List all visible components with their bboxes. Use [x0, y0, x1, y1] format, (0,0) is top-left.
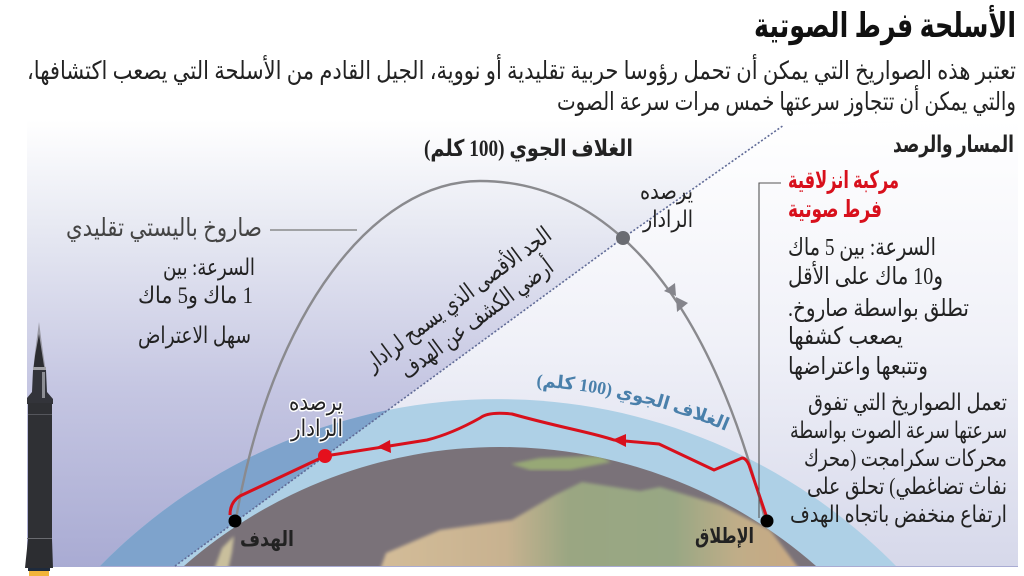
text: hypersonic speed: [788, 235, 943, 290]
background sky: [27, 120, 1018, 567]
label: detected by radar upper: يرصده: [640, 179, 693, 205]
label: detected by radar lower: الرادار: [290, 416, 343, 442]
target dot: [228, 514, 242, 528]
text: ballistic speed: 1 ماك و5 ماك: [138, 283, 253, 309]
label: launch: الإطلاق: [695, 524, 754, 548]
text: ballistic speed: السرعة: بين: [163, 255, 255, 281]
label: detected by radar lower: يرصده: [289, 390, 343, 416]
earth: [184, 447, 816, 570]
rotated label: max radar detection: الحد الأقصى الذي يسمح لرادار: [358, 220, 557, 377]
atmosphere band: [100, 399, 896, 566]
label: target: الهدف: [240, 527, 294, 551]
rotated label: max radar detection: [358, 220, 559, 384]
text: hypersonic launch: وتتبعها واعتراضها: [788, 354, 928, 380]
curved label: atmosphere: الغلاف الجوي (100 كلم): [537, 374, 730, 430]
text: hypersonic speed: السرعة: بين 5 ماك: [788, 235, 936, 261]
label: detected by radar lower: [289, 390, 343, 442]
ballistic missile trajectory: [236, 181, 765, 519]
text: hypersonic speed: و10 ماك على الأقل: [788, 261, 943, 290]
radar horizon dotted line: [175, 125, 784, 566]
hypersonic glide vehicle trajectory: [230, 413, 767, 518]
label: detected by radar upper: الرادار: [642, 207, 693, 233]
arrowhead: [377, 440, 391, 453]
label: hypersonic vehicle: [788, 168, 899, 223]
text: ballistic speed: [138, 255, 255, 309]
trajectory arrowhead: [664, 283, 676, 296]
label: atmosphere: الغلاف الجوي (100 كلم): [424, 136, 633, 162]
intro text: [27, 53, 1016, 117]
label: ballistic missile: صاروخ باليستي تقليدي: [66, 215, 262, 243]
label: detected by radar upper: [640, 179, 693, 233]
radar detection dot: hypersonic: [318, 449, 332, 463]
launch dot: [760, 514, 774, 528]
text: scramjet paragraph: [790, 390, 1007, 528]
radar visible wedge: [175, 120, 1018, 566]
leader line: hypersonic: [759, 183, 781, 518]
text: hypersonic launch: يصعب كشفها: [788, 324, 903, 350]
icon: missile: [25, 322, 53, 576]
leader line: ballistic: [270, 229, 357, 231]
label: hypersonic vehicle: فرط صوتية: [788, 197, 882, 223]
panel: trajectory diagram: [27, 120, 1018, 570]
text: hypersonic launch: تطلق بواسطة صاروخ.: [788, 296, 969, 322]
trajectory arrowhead: [676, 297, 688, 312]
text: hypersonic launch: [788, 296, 969, 380]
rotated label: max radar detection: أرضي الكشف عن الهدف: [393, 252, 559, 384]
arrowhead: [612, 434, 626, 447]
label: hypersonic vehicle: مركبة انزلاقية: [788, 168, 899, 194]
text: easy to intercept: سهل الاعتراض: [138, 323, 251, 349]
radar detection dot: ballistic: [616, 231, 630, 245]
